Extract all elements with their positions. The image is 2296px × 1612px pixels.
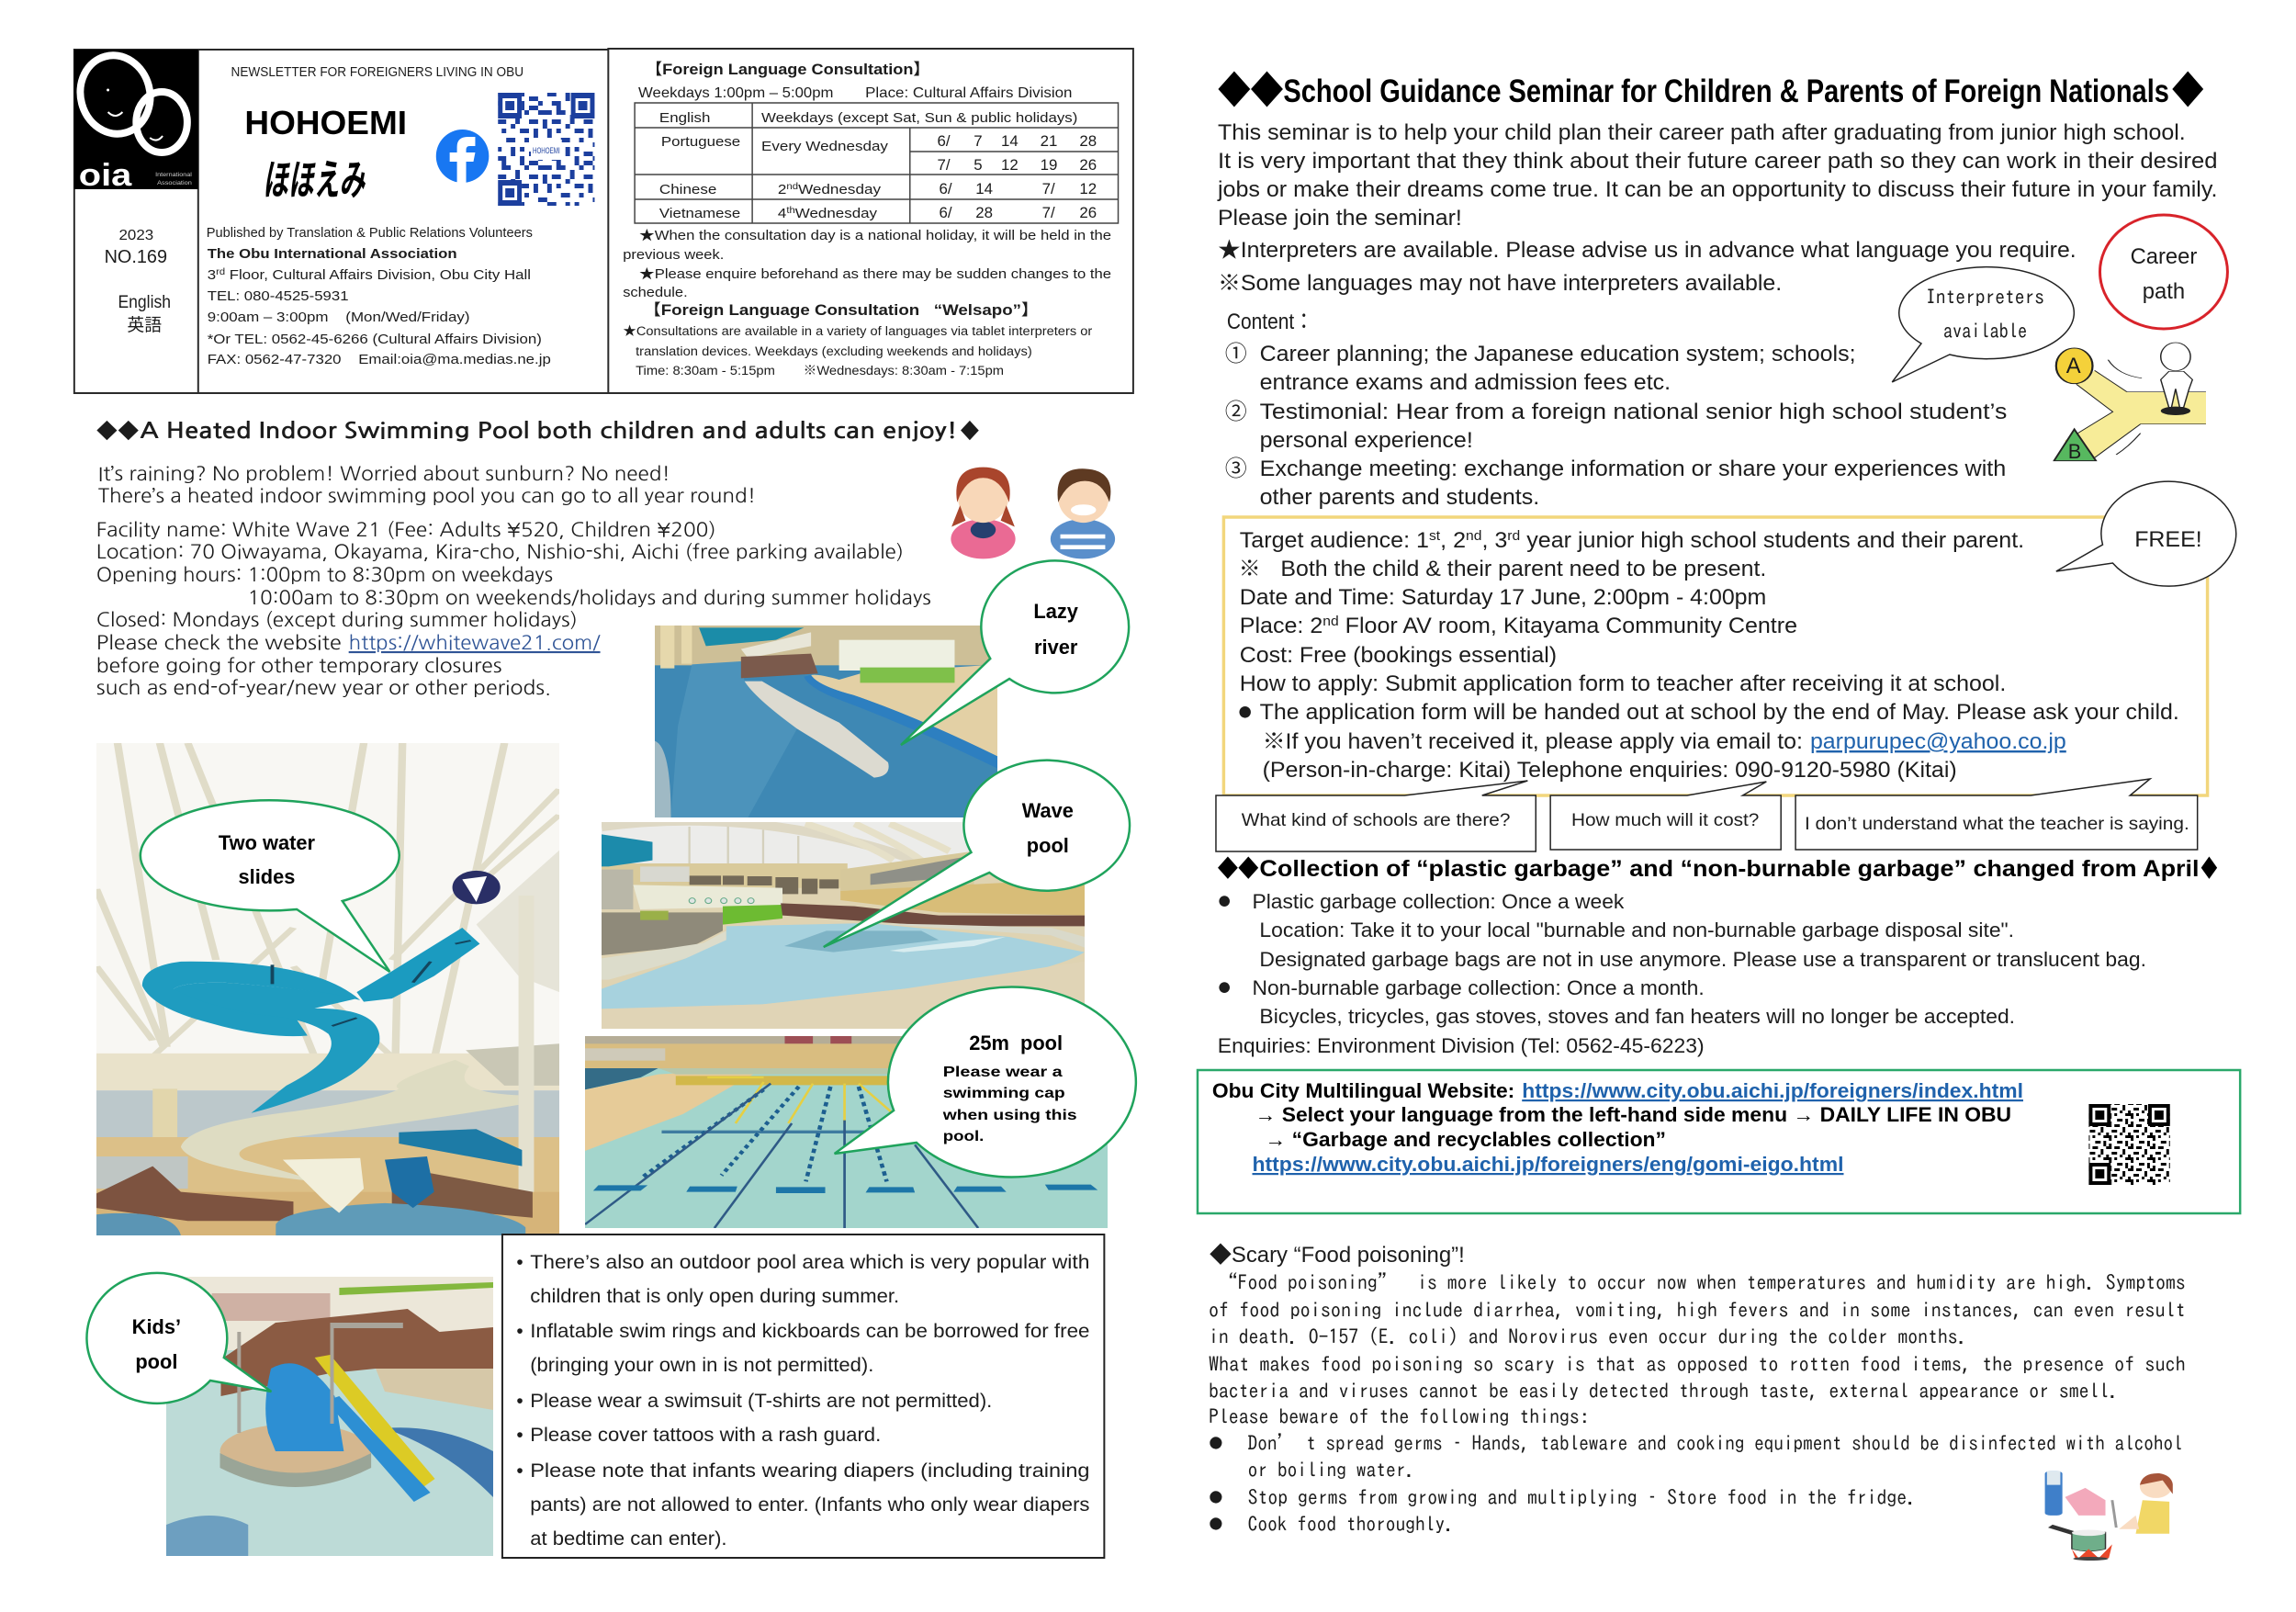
intro text: There’s a heated indoor swimming pool you can go to all year round! [98,487,756,506]
website links text: → Select your language from the left-hand side menu → DAILY LIFE IN OBU [1255,1103,2011,1126]
consultation table: 6/ [940,180,952,197]
seminar details text: , 2 [1440,528,1466,553]
icon: OIA logo: International [155,173,192,178]
icon: OIA logo: oia [79,158,133,193]
consultation table: 7/ [1042,204,1055,221]
callout: interpreters available [1892,267,2074,382]
title: hohoemi in hiragana: ほほえみ [261,147,372,208]
rules list: • [516,1252,523,1273]
callout: wave pool: Wave [1022,799,1074,822]
rules list: Please wear a swimsuit (T-shirts are not permitted). [530,1391,992,1412]
facility details: Closed: Mondays (except during summer holidays) [96,610,578,630]
publisher contact text: TEL: 080-4525-5931 [208,288,349,304]
seminar content list: entrance exams and admission fees etc. [1260,370,1671,395]
seminar details text: Cost: Free (bookings essential) [1240,643,1557,668]
rules list: • [516,1321,523,1342]
photo: 25m pool [585,1036,1108,1228]
garbage rules: Designated garbage bags are not in use anymore. Please use a transparent or translucent bag. [1259,948,2146,971]
seminar content list: Content： [1227,310,1313,334]
consultation table: 7/ [938,156,951,174]
photo: lazy river [655,626,997,817]
panel: Obu City multilingual website [1198,1070,2240,1213]
seminar details text: nd [1466,528,1481,544]
callout: wave pool: pool [1027,834,1069,857]
consultation table: 6/ [940,204,952,221]
rules list: • [516,1425,523,1446]
callout: 25m pool: Please wear a [943,1065,1063,1080]
rules list: • [516,1460,523,1482]
heading: garbage collection: Collection of “plastic garbage” and “non-burnable garbage” changed from April [1259,856,2200,882]
seminar details text: year junior high school students and their parent. [1520,528,2024,553]
masthead frame [74,49,1133,393]
food poisoning text: in death. O-157 (E. coli) and Norovirus even occur during the colder months. [1209,1326,1968,1347]
panel: school guidance seminar [1217,71,2227,510]
consultation hours and place: Place: Cultural Affairs Division [865,85,1072,101]
callout: career path: Career [2131,244,2197,269]
food poisoning text: Cook food thoroughly. [1248,1514,1455,1534]
seminar details text: The application form will be handed out at school by the end of May. Please ask your child. [1260,700,2179,725]
rules list: Please note that infants wearing diapers (including training [530,1460,1089,1482]
newsletter tagline: NEWSLETTER FOR FOREIGNERS LIVING IN OBU [231,64,523,80]
facility details: https://whitewave21.com/ [349,634,601,653]
rules list: children that is only open during summer. [530,1286,899,1307]
Welsapo details: Time: 8:30am - 5:15pm [636,363,775,378]
seminar details text: How to apply: Submit application form to teacher after receiving it at school. [1240,671,2006,696]
callout: 25m pool: 25m pool [969,1031,1063,1054]
seminar details text: Floor AV room, Kitayama Community Centre [1339,614,1797,638]
facility details: such as end-of-year/new year or other periods. [96,679,551,698]
consultation table: 5 [974,156,983,174]
publisher contact text: *Or TEL: 0562-45-6266 (Cultural Affairs Division) [208,332,542,347]
callout: career path [2100,215,2227,329]
facility details: 10:00am to 8:30pm on weekends/holidays and during summer holidays [248,589,931,608]
callout: two water slides: slides [239,865,295,888]
callout: teacher [1795,779,2198,850]
garbage rules: Non-burnable garbage collection: Once a month. [1253,976,1705,999]
consultation table: 26 [1079,204,1097,221]
food poisoning text: Don’ t spread germs – Hands, tableware and cooking equipment should be disinfected with alcohol [1248,1433,2183,1453]
seminar details text: Both the child & their parent need to be present. [1280,557,1766,581]
icon: OIA logo: Association [157,181,192,186]
callout: kids pool: pool [135,1350,177,1373]
icon: hygiene and cooking illustration [2044,1471,2173,1561]
callout: two water slides: Two water [219,831,315,854]
consultation table: 21 [1041,132,1057,150]
seminar details text: ※ [1239,557,1261,581]
garbage rules: Location: Take it to your local "burnable and non-burnable garbage disposal site". [1259,919,2014,941]
panel: seminar details [1216,481,2236,851]
facility details: Please check the website [96,634,342,653]
Welsapo details [623,323,1093,378]
facility details: Facility name: White Wave 21 (Fee: Adults ¥520, Children ¥200) [96,520,716,540]
facility details [96,520,931,698]
seminar description: ★Interpreters are available. Please advise us in advance what language you require. [1218,238,2077,263]
callout: 25m pool [835,986,1136,1177]
callout: what kind of schools: What kind of schools are there? [1242,811,1510,830]
photo: wave pool [602,822,1085,1029]
consultation table: 7/ [1042,180,1055,197]
consultation table: 14 [1001,132,1019,150]
publisher contact text: FAX: 0562-47-7320 Email:oia@ma.medias.ne.jp [208,352,551,367]
consultation table: 12 [1001,156,1019,174]
garbage rules: ● [1219,892,1231,909]
garbage rules: Bicycles, tricycles, gas stoves, stoves and fan heaters will no longer be accepted. [1259,1005,2015,1028]
seminar content list: ② [1225,400,1247,424]
consultation table: 26 [1079,156,1097,174]
icon: children with swim rings [951,467,1115,558]
rules list [516,1252,1089,1550]
consultation table: 28 [1079,132,1097,150]
seminar details text: parpurupec@yahoo.co.jp [1810,729,2066,754]
consultation table: Weekdays (except Sat, Sun & public holidays) [761,110,1077,126]
consultation table: 4 [778,206,785,221]
rules list: • [516,1391,523,1412]
food poisoning text: What makes food poisoning so scary is that as opposed to rotten food items, the presence of such [1209,1354,2186,1374]
icon: Facebook QR code [498,93,594,206]
panel: food poisoning [1209,1243,2186,1561]
garbage rules: ● [1219,978,1231,996]
callout: 25m pool: pool. [943,1129,984,1144]
food poisoning text: Please beware of the following things: [1209,1406,1590,1426]
facility details: before going for other temporary closures [96,657,502,676]
icon: website QR code [2088,1104,2170,1185]
rules list: Please cover tattoos with a rash guard. [530,1425,881,1446]
panel: indoor pool intro [96,420,1115,698]
Welsapo details: ★Consultations are available in a variety of languages via tablet interpreters or [623,323,1093,338]
consultation table: 28 [975,204,993,221]
facility details: Opening hours: 1:00pm to 8:30pm on weekdays [96,566,553,585]
callout: career path: path [2143,279,2185,304]
heading: garbage collection: ◆◆ [1218,856,1259,882]
seminar details text: Place: 2 [1240,614,1319,638]
Welsapo details: ※Wednesdays: 8:30am - 7:15pm [804,363,1004,378]
issue details: 2023 [118,228,153,243]
callout: two water slides [141,800,400,972]
seminar content list: Exchange meeting: exchange information or share your experiences with [1260,457,2006,481]
callout: 25m pool: when using this [942,1108,1077,1123]
consultation table: Every Wednesday [761,139,889,154]
Welsapo details: translation devices. Weekdays (excluding weekends and holidays) [636,344,1032,358]
garbage rules [1218,890,2146,1057]
callout: free [2056,481,2236,586]
callout: interpreters available: available [1943,321,2027,341]
seminar content list [1225,310,2007,510]
consultation table: nd [786,182,798,192]
consultation notes: schedule. [623,285,688,300]
seminar details text: ● [1239,704,1252,722]
heading: foreign language consultation: 【Foreign Language Consultation】 [646,61,930,78]
food poisoning text: “Food poisoning” is more likely to occur now when temperatures and humidity are high. Symptoms [1218,1272,2186,1292]
rules list: at bedtime can enter). [530,1528,727,1550]
heading: heated indoor pool: ◆◆ [96,420,139,442]
consultation table: Wednesday [795,206,878,221]
food poisoning text: Stop germs from growing and multiplying – Store food in the fridge. [1248,1487,1917,1507]
panel: newsletter masthead [72,48,1133,393]
icon: Facebook [436,130,489,183]
callout: lazy river: Lazy [1033,600,1079,623]
seminar details text: Date and Time: Saturday 17 June, 2:00pm - 4:00pm [1240,585,1766,610]
seminar details text: rd [1507,528,1520,544]
callout: kids pool [86,1273,271,1403]
heading: heated indoor pool: ◆ [961,420,979,442]
seminar details text: (Person-in-charge: Kitai) Telephone enquiries: 090-9120-5980 (Kitai) [1263,758,1957,783]
rules list: There’s also an outdoor pool area which is very popular with [530,1252,1089,1273]
panel: garbage collection [1218,856,2217,1057]
consultation table: 2 [778,182,785,197]
callout: lazy river: river [1034,636,1078,659]
issue details: 英語 [127,315,162,335]
consultation notes [623,228,1111,300]
callout: teacher: I don’t understand what the teacher is saying. [1805,815,2189,834]
consultation table: 14 [975,180,993,197]
icon: person at career fork: A [2066,354,2081,378]
website links text: https://www.city.obu.aichi.jp/foreigners/index.html [1522,1079,2023,1102]
issue details: English [118,293,171,312]
website links text: https://www.city.obu.aichi.jp/foreigners/eng/gomi-eigo.html [1253,1153,1844,1176]
seminar details text: st [1429,528,1441,544]
consultation table: Portuguese [661,134,740,150]
heading: school guidance seminar: ◆◆ [1218,71,1284,111]
consultation table: 19 [1041,156,1057,174]
consultation hours and place [638,85,1072,101]
food poisoning text [1209,1272,2186,1534]
seminar content list: ③ [1225,457,1247,481]
heading: heated indoor pool: A Heated Indoor Swimming Pool both children and adults can enjoy! [140,420,958,442]
callout: 25m pool: swimming cap [943,1086,1065,1101]
food poisoning text: of food poisoning include diarrhea, vomiting, high fevers and in some instances, can even result [1209,1300,2186,1320]
publisher contact text: The Obu International Association [208,246,457,262]
consultation table: English [659,110,710,126]
consultation notes: previous week. [623,247,724,263]
heading: Welsapo: 【Foreign Language Consultation “Welsapo”】 [644,301,1039,319]
seminar content list: Testimonial: Hear from a foreign national senior high school student’s [1260,400,2007,424]
rules list: (bringing your own in is not permitted). [530,1355,873,1376]
seminar content list: personal experience! [1260,428,1473,453]
consultation table: 6/ [938,132,951,150]
heading: school guidance seminar: ◆ [2172,71,2204,111]
icon: OIA logo [72,48,198,193]
publisher contact text [207,225,551,367]
food poisoning text: or boiling water. [1248,1460,1415,1480]
website links text [1212,1079,2023,1176]
seminar description: It is very important that they think about their future career path so they can work in their desired [1218,149,2218,174]
website links text: Obu City Multilingual Website: [1212,1079,1514,1102]
seminar description [1217,120,2218,296]
seminar description: Please join the seminar! [1218,206,1462,231]
rules list: pants) are not allowed to enter. (Infants who only wear diapers [530,1494,1089,1516]
seminar description: This seminar is to help your child plan their career path after graduating from junior high school. [1218,120,2186,145]
consultation hours and place: Weekdays 1:00pm – 5:00pm [638,85,833,101]
photo: kids pool [166,1277,493,1556]
seminar description: ※Some languages may not have interpreters available. [1218,271,1782,296]
seminar content list: other parents and students. [1260,485,1539,510]
seminar description: jobs or make their dreams come true. It can be an opportunity to discuss their future in your family. [1217,177,2218,202]
seminar details text: ※If you haven’t received it, please apply via email to: [1263,729,1803,754]
icon: Facebook QR code: HOHOEMI [533,146,560,155]
consultation table: Vietnamese [659,206,740,221]
consultation table: th [786,206,795,216]
callout: lazy river [901,560,1129,745]
consultation notes: ★Please enquire beforehand as there may be sudden changes to the [639,266,1111,282]
icon: person at career fork: B [2068,440,2081,463]
seminar details text: Target audience: 1 [1240,528,1420,553]
heading: food poisoning: ◆Scary “Food poisoning”! [1210,1243,1465,1268]
publisher contact text: Floor, Cultural Affairs Division, Obu City Hall [225,267,531,283]
intro text: It’s raining? No problem! Worried about sunburn? No need! [98,465,670,484]
consultation notes: ★When the consultation day is a national holiday, it will be held in the [639,228,1111,243]
issue details [105,228,171,335]
food poisoning text: bacteria and viruses cannot be easily detected through taste, external appearance or smell. [1209,1381,2119,1401]
publisher contact text: rd [216,267,225,277]
panel: pool rules [502,1234,1104,1558]
consultation table: Chinese [659,182,716,197]
heading: garbage collection: ◆ [2200,856,2217,882]
consultation table [635,103,1119,223]
callout: how much will it cost: How much will it cost? [1571,811,1759,830]
seminar details text [1239,528,2179,783]
food poisoning text: ● [1209,1436,1223,1450]
facility details: Location: 70 Oiwayama, Okayama, Kira-cho, Nishio-shi, Aichi (free parking available) [96,542,904,562]
consultation table: 7 [974,132,983,150]
callout: free: FREE! [2134,527,2202,552]
food poisoning text: ● [1209,1490,1223,1505]
title: HOHOEMI: HOHOEMI [244,105,407,141]
seminar content list: Career planning; the Japanese education system; schools; [1260,342,1856,366]
consultation table: Wednesday [798,182,882,197]
icon: person at career fork [2054,343,2206,463]
garbage rules: Plastic garbage collection: Once a week [1253,890,1624,913]
issue details: NO.169 [105,247,167,267]
callout: interpreters available: Interpreters [1926,287,2044,307]
photo: water slides [96,743,559,1235]
website links text: → “Garbage and recyclables collection” [1265,1128,1666,1151]
callout: what kind of schools [1216,781,1536,851]
consultation table: 12 [1079,180,1097,197]
seminar details text: nd [1322,614,1339,629]
publisher contact text: 3 [208,267,215,283]
publisher contact text: 9:00am – 3:00pm (Mon/Wed/Friday) [208,310,470,325]
garbage rules: Enquiries: Environment Division (Tel: 0562-45-6223) [1218,1034,1705,1057]
publisher contact text: Published by Translation & Public Relations Volunteers [207,225,533,241]
callout: wave pool [824,761,1130,947]
seminar content list: ① [1225,342,1247,366]
callout: kids pool: Kids’ [132,1315,181,1338]
seminar details text: , 3 [1481,528,1507,553]
intro text [98,465,756,506]
callout: how much will it cost [1550,782,1781,850]
rules list: Inflatable swim rings and kickboards can be borrowed for free [530,1321,1089,1342]
food poisoning text: ● [1209,1516,1223,1531]
